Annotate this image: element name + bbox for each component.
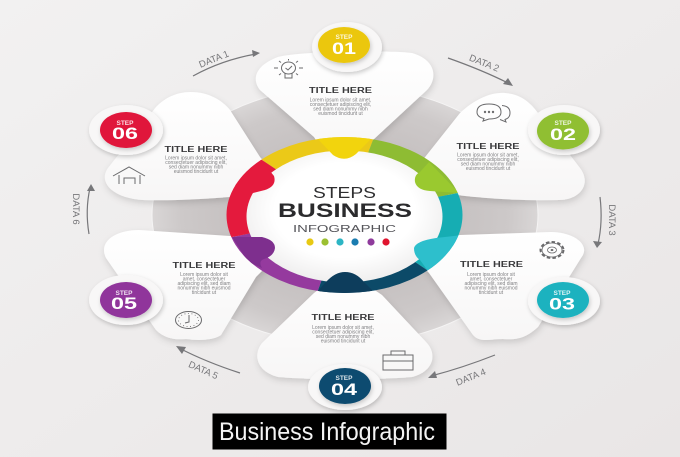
text block step 6: Lorem ipsum dolor sit amet, xyxy=(165,156,227,162)
ring segment navy xyxy=(318,262,428,293)
step 01 badge: 01 xyxy=(332,40,356,58)
ring puzzle heads xyxy=(232,137,463,297)
text block step 5: amet, consectetuer xyxy=(183,276,226,282)
panel: step 6 petal xyxy=(105,92,295,200)
step 06 badge: STEP xyxy=(117,120,134,127)
ring segment teal xyxy=(415,193,462,270)
head navy xyxy=(318,272,372,293)
text block step 5: nonummy nibh euismod xyxy=(177,286,231,292)
text block step 1: TITLE HERE xyxy=(309,85,372,95)
icon: speech bubbles xyxy=(477,104,510,122)
arrow: data 6 xyxy=(70,184,95,234)
arrow: data 6: DATA 6 xyxy=(70,193,81,225)
step 06 badge xyxy=(89,105,163,155)
panel: step 2 petal xyxy=(395,93,585,200)
text block step 3 xyxy=(460,259,523,296)
text block step 4 xyxy=(312,312,375,344)
text block step 1: sed diam nonummy nibh xyxy=(313,106,368,112)
panel: step 4 petal xyxy=(257,270,432,379)
panel: step 3 petal xyxy=(395,232,584,340)
head teal xyxy=(414,236,458,270)
text block step 2: consectetuer adipiscing elit, xyxy=(457,157,519,163)
text block step 5 xyxy=(172,260,236,296)
ring segment green xyxy=(368,139,458,197)
infographic: INFOGRAPHIC xyxy=(293,223,397,235)
arrow: data 1: DATA 1 xyxy=(197,49,231,71)
step 02 badge: 02 xyxy=(550,126,576,144)
ring segment yellow xyxy=(262,137,374,170)
step 06 badge: 06 xyxy=(112,125,138,143)
icon: briefcase xyxy=(383,351,413,370)
arrow: data 4: DATA 4 xyxy=(454,367,488,389)
text block step 2: euismod tincidunt ut xyxy=(466,166,511,172)
business: BUSINESS xyxy=(278,201,412,222)
color dots xyxy=(306,238,390,246)
step 01 badge: STEP xyxy=(336,34,353,41)
arrow: data 1 xyxy=(193,49,260,76)
text block step 3: tincidunt ut xyxy=(479,290,504,296)
ring segment red xyxy=(226,160,276,238)
arrow: data 3 xyxy=(593,197,617,248)
text block step 1: consectetuer adipiscing elit, xyxy=(310,102,371,108)
text block step 3: Lorem ipsum dolor sit xyxy=(467,272,516,278)
icon: light bulb xyxy=(274,59,303,78)
step 03 badge xyxy=(528,277,600,325)
step 02 badge xyxy=(528,105,600,155)
text block step 1: euismod tincidunt ut xyxy=(318,111,363,117)
head green xyxy=(415,162,459,193)
text block step 4: Lorem ipsum dolor sit amet, xyxy=(312,325,374,331)
gray disc behind petals xyxy=(152,86,538,344)
text block step 1 xyxy=(309,85,372,117)
text block step 5: TITLE HERE xyxy=(172,260,236,270)
step 04 badge: STEP xyxy=(336,375,353,382)
panel: step 1 petal xyxy=(256,51,433,162)
text block step 6: consectetuer adipiscing elit, xyxy=(165,160,227,166)
arrow: data 2 xyxy=(448,53,513,86)
text block step 6 xyxy=(164,144,228,175)
step 01 badge xyxy=(312,22,382,72)
arrow: data 5: DATA 5 xyxy=(186,359,220,382)
text block step 2: Lorem ipsum dolor sit amet, xyxy=(457,152,519,158)
panel: step 5 petal xyxy=(104,230,295,340)
arrow: data 4 xyxy=(428,355,495,389)
step 03 badge: STEP xyxy=(554,290,571,297)
step 02 badge: STEP xyxy=(555,120,572,127)
text block step 2 xyxy=(456,141,520,172)
head purple xyxy=(232,237,275,268)
step 04 badge: 04 xyxy=(331,381,358,399)
arrow: data 3: DATA 3 xyxy=(606,204,617,236)
petals xyxy=(104,51,585,379)
step 05 badge xyxy=(89,275,163,325)
steps: STEPS xyxy=(313,185,376,202)
center circle xyxy=(246,150,442,282)
text block step 2: TITLE HERE xyxy=(456,141,520,151)
text block step 2: sed diam nonummy nibh xyxy=(461,162,515,168)
step 04 badge xyxy=(308,364,382,410)
step 03 badge: 03 xyxy=(549,296,575,314)
text block step 4: consectetuer adipiscing elit, xyxy=(312,330,374,336)
step 05 badge: STEP xyxy=(116,290,133,297)
text block step 5: adipiscing elit, sed diam xyxy=(177,281,231,287)
caption bar: Business Infographic xyxy=(219,418,435,446)
icon: house xyxy=(113,167,145,184)
text block step 4: euismod tincidunt ut xyxy=(321,338,366,344)
text block step 3: nonummy nibh euismod xyxy=(464,286,518,292)
ring segment purple xyxy=(231,234,322,291)
text block step 3: TITLE HERE xyxy=(460,259,523,269)
arrow: data 2: DATA 2 xyxy=(467,53,501,75)
arrow: data 5 xyxy=(176,346,240,382)
head yellow xyxy=(316,137,373,159)
text block step 1: Lorem ipsum dolor sit amet, xyxy=(310,98,371,104)
center title xyxy=(278,185,412,235)
text block step 3: amet, consectetuer xyxy=(470,276,513,282)
text block step 6: euismod tincidunt ut xyxy=(174,169,219,175)
step 05 badge: 05 xyxy=(111,295,137,313)
text block step 6: TITLE HERE xyxy=(164,144,228,154)
central colored ring xyxy=(226,137,462,293)
icon: gear xyxy=(540,242,564,258)
text block step 4: TITLE HERE xyxy=(312,312,375,322)
icon: clock xyxy=(176,312,202,328)
text block step 5: tincidunt ut xyxy=(192,290,217,296)
text block step 4: sed diam nonummy nibh xyxy=(316,334,370,340)
text block step 3: adipiscing elit, sed diam xyxy=(464,281,518,287)
text block step 6: sed diam nonummy nibh xyxy=(169,164,223,170)
text block step 5: Lorem ipsum dolor sit xyxy=(180,272,229,278)
head red xyxy=(235,160,275,195)
